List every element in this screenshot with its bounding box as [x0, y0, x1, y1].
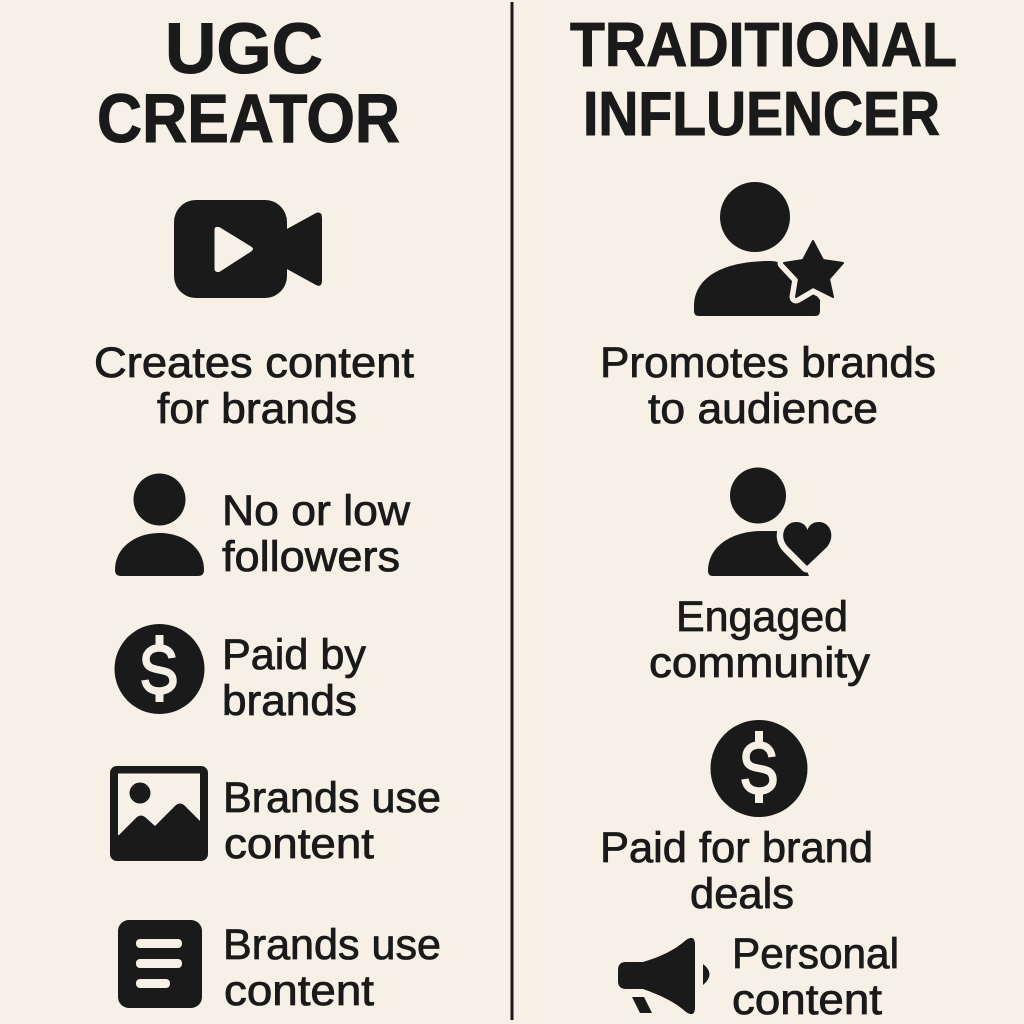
text: brands use content 2: Brands use: [223, 921, 441, 969]
text: brands use content 1: Brands use: [223, 774, 441, 822]
icon: person: [115, 474, 204, 576]
icon: dollar coin left: [114, 624, 204, 714]
text: brands use content 2: content: [224, 967, 374, 1015]
text: engaged community: [649, 593, 871, 687]
heading: UGC creator: UGC: [165, 10, 323, 89]
text: engaged community: community: [649, 639, 871, 687]
icon: person with star: [694, 182, 843, 316]
text: creates content for brands: [94, 339, 414, 433]
text: paid by brands: brands: [222, 677, 357, 725]
text: no or low followers: [222, 487, 411, 581]
text: brands use content 1: [223, 774, 441, 868]
heading: traditional influencer: [570, 11, 957, 149]
text: paid for brand deals: Paid for brand: [600, 824, 873, 872]
text: creates content for brands: for brands: [157, 385, 357, 433]
text: no or low followers: followers: [222, 533, 400, 581]
text: brands use content 2: [223, 921, 441, 1015]
text: personal content: content: [732, 976, 882, 1024]
text: paid by brands: Paid by: [222, 631, 366, 679]
icon: video camera: [174, 200, 322, 298]
text: brands use content 1: content: [224, 820, 374, 868]
text: personal content: [732, 930, 899, 1024]
heading: UGC creator: [97, 10, 400, 157]
heading: UGC creator: CREATOR: [97, 80, 400, 157]
text: promotes brands to audience: [600, 339, 936, 433]
text: promotes brands to audience: Promotes brands: [600, 339, 936, 387]
icon: document: [118, 920, 202, 1008]
icon: person with heart: [708, 468, 831, 576]
icon: image: [110, 766, 208, 861]
heading: traditional influencer: INFLUENCER: [583, 80, 940, 149]
icon: dollar coin right: [710, 720, 808, 817]
text: paid by brands: [222, 631, 366, 725]
text: no or low followers: No or low: [222, 487, 411, 535]
heading: traditional influencer: TRADITIONAL: [570, 11, 957, 80]
text: engaged community: Engaged: [676, 593, 848, 641]
text: creates content for brands: Creates content: [94, 339, 414, 387]
text: paid for brand deals: deals: [690, 870, 794, 918]
text: paid for brand deals: [600, 824, 873, 918]
icon: megaphone: [618, 938, 710, 1014]
text: personal content: Personal: [732, 930, 899, 978]
text: promotes brands to audience: to audience: [648, 385, 878, 433]
